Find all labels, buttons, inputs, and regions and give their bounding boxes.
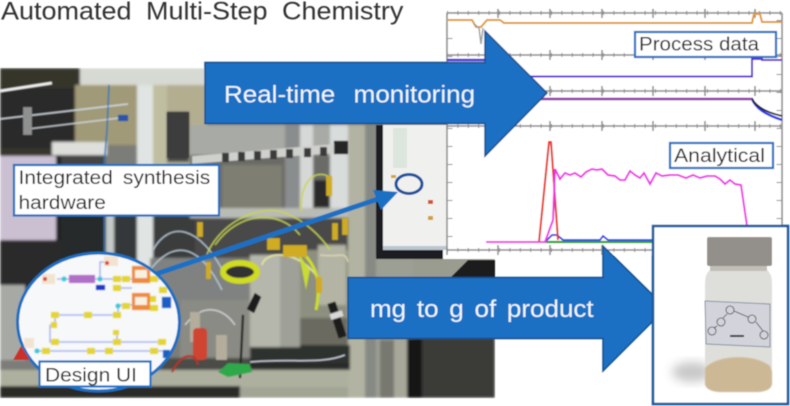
output icon [163,350,170,358]
lower right of photo [376,258,413,398]
label: integrated synthesis hardware [14,165,219,216]
label: integrated synthesis hardware: hardware [18,193,106,214]
orange reactor blocks [132,266,150,283]
label: integrated synthesis hardware: Integrated synthesis [18,168,210,189]
metal fittings [190,312,227,360]
vial photo panel [653,226,788,404]
arrow: mg to g of product [348,246,666,371]
lilac panel [0,156,60,240]
monitor [376,125,450,259]
shelf and columns [190,125,350,155]
analytical traces [545,241,652,243]
navy module [96,285,105,290]
purple module [69,275,95,283]
vial powder [705,357,772,392]
dark corner behind lower arrow [450,260,495,278]
vial glass [705,270,772,392]
right grey post [348,125,365,398]
tubing [150,174,348,362]
label: design UI: Design UI [45,365,137,386]
yellow-green ring [223,263,257,281]
power strip [192,143,347,164]
upper left dark cabinet [0,68,85,158]
photo: synthesis hardware [0,68,495,398]
vial label [705,301,770,347]
green part [218,363,252,377]
cyan nodes [34,276,120,354]
monitor highlight ellipse [396,174,422,194]
chart: process data and analytical traces [443,9,782,259]
pump icons [42,274,55,284]
grey reactor box [250,255,282,347]
blue cable [104,85,109,260]
second trace [447,59,490,61]
warning triangle [13,346,30,360]
arrow: real-time monitoring [205,31,547,156]
black fittings [247,293,261,313]
bench [250,345,350,370]
red coil [193,328,207,360]
design UI magnifier [18,253,180,391]
dark hanging module [167,112,189,158]
yellow connectors [197,176,348,293]
instruments area [148,256,240,289]
label: analytical: Analytical [674,145,765,167]
flow lines [36,262,170,351]
arrow: mg to g of product: mg to g of product [370,296,594,323]
top trace [447,14,782,27]
vial cap [707,237,772,266]
label: process data: Process data [639,34,760,55]
glass rails [0,104,128,119]
vial shadow [672,362,712,382]
third trace [540,99,782,120]
arrow: real-time monitoring: Real-time monitoring [224,81,475,108]
pointer arrow from design UI to monitor [156,190,398,274]
